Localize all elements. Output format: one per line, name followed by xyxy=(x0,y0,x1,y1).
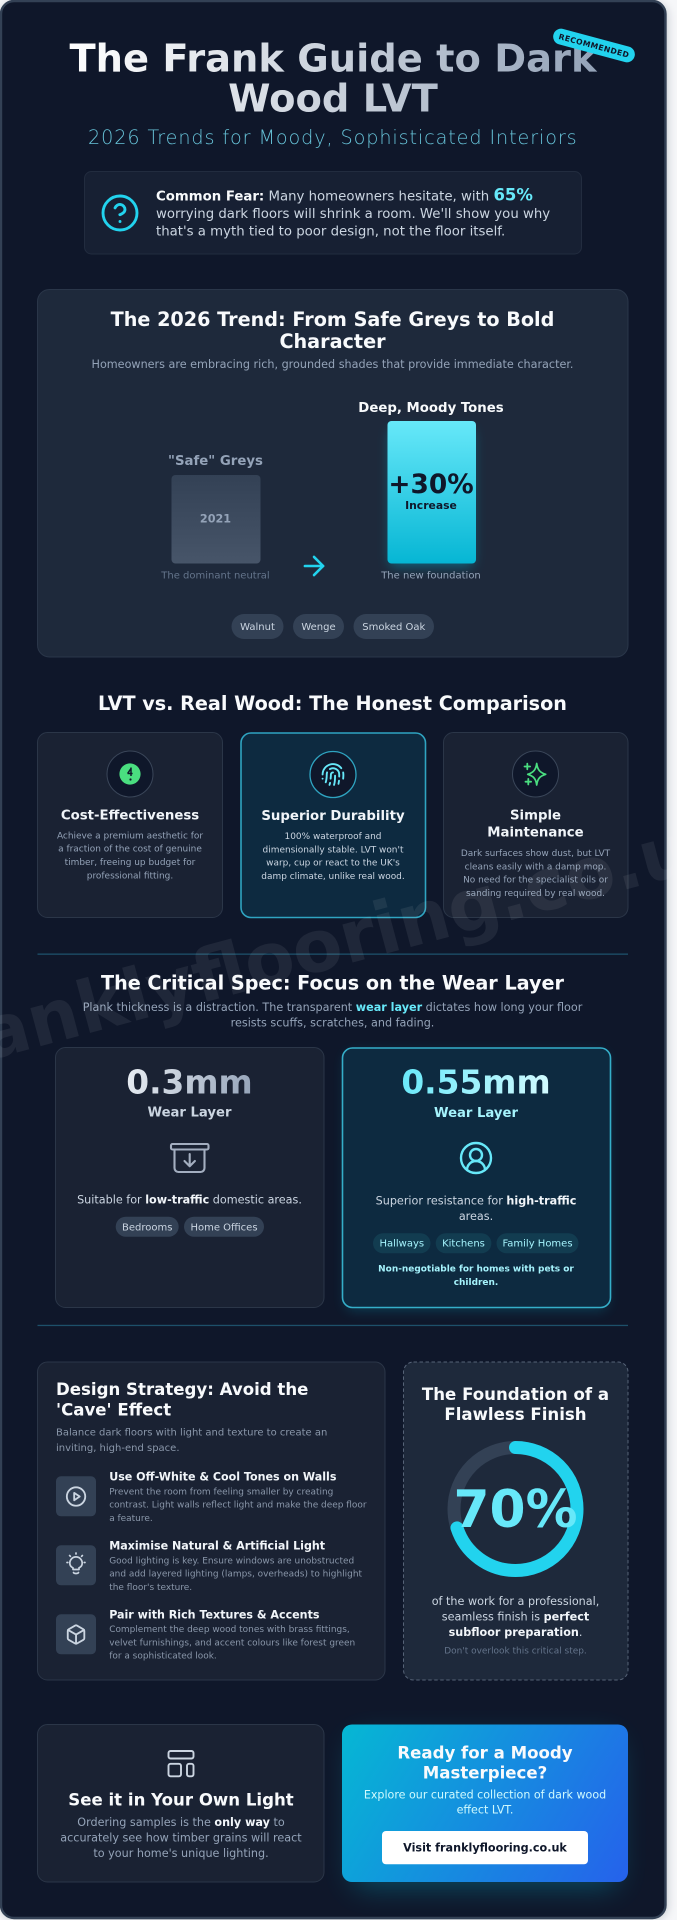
tags: high traffic rooms xyxy=(373,1233,578,1253)
card: cost-effectiveness xyxy=(38,732,222,918)
panel: design strategy xyxy=(38,1362,385,1680)
recommended badge xyxy=(551,27,637,64)
foundation text: seamless finish is perfect xyxy=(442,1611,590,1624)
card text: Achieve a premium aesthetic for xyxy=(57,831,203,841)
panel: samples xyxy=(38,1724,324,1882)
callout text: Common Fear: Many homeowners hesitate, with 65% xyxy=(156,185,533,204)
card text xyxy=(261,832,405,882)
foundation text xyxy=(432,1595,599,1639)
heading: 2026 trend xyxy=(111,308,554,353)
recommended badge: RECOMMENDED xyxy=(558,32,630,60)
card: 0.3mm: 0.3mm xyxy=(126,1063,253,1101)
card text: damp climate, unlike real wood. xyxy=(261,872,405,882)
card: 0.55mm: Superior resistance for high-traffic xyxy=(376,1194,576,1207)
note: children. xyxy=(454,1278,498,1288)
bar: safe greys: The dominant neutral xyxy=(160,571,270,582)
card text: warp, cup or react to the UK's xyxy=(266,859,400,869)
bar: deep moody tones xyxy=(358,401,504,582)
samples text: Ordering samples is the only way to xyxy=(77,1816,285,1829)
bar: deep moody tones: The new foundation xyxy=(380,571,481,582)
card: 0.55mm: Wear Layer xyxy=(434,1106,518,1121)
note: Non-negotiable for homes with pets or xyxy=(378,1265,574,1275)
icon: question mark xyxy=(103,196,137,230)
samples text: to your home's unique lighting. xyxy=(93,1847,269,1860)
tags: high traffic rooms: Hallways xyxy=(379,1239,424,1250)
icon: user xyxy=(461,1143,491,1173)
card: 0.3mm xyxy=(56,1048,324,1308)
panel: foundation xyxy=(404,1362,628,1680)
strategy item: textures: velvet furnishings, and accent colours like forest green xyxy=(109,1638,355,1648)
tags: low traffic rooms: Bedrooms xyxy=(122,1222,172,1233)
tags: high traffic rooms: Kitchens xyxy=(442,1239,485,1250)
card text: dimensionally stable. LVT won't xyxy=(263,845,404,855)
panel: design strategy: Design Strategy: Avoid the xyxy=(56,1380,308,1399)
card text: 100% waterproof and xyxy=(285,832,381,842)
panel: call to action: Masterpiece? xyxy=(423,1763,547,1782)
panel: 2026 trend xyxy=(38,290,628,657)
card text: cleans easily with a damp mop. xyxy=(465,862,606,872)
strategy item: textures xyxy=(56,1608,355,1662)
strategy item: light xyxy=(56,1540,363,1593)
panel: design strategy: 'Cave' Effect xyxy=(56,1400,171,1419)
foundation text: of the work for a professional, xyxy=(432,1595,599,1608)
bar: deep moody tones: Increase xyxy=(405,499,457,512)
heading: 2026 trend: Character xyxy=(279,330,386,353)
callout: common fear xyxy=(84,172,582,254)
note xyxy=(378,1265,574,1288)
wear layer description: Plank thickness is a distraction. The transparent wear layer dictates how long your floor xyxy=(83,1001,583,1014)
strategy item: light: the floor's texture. xyxy=(109,1583,192,1593)
strategy description: Balance dark floors with light and texture to create an xyxy=(56,1428,327,1439)
foundation text: subfloor preparation. xyxy=(449,1626,582,1639)
bar: safe greys: 2021 xyxy=(200,513,231,526)
strategy item: light: Good lighting is key. Ensure windows are unobstructed xyxy=(109,1556,354,1566)
strategy item: light: Maximise Natural & Artificial Light xyxy=(109,1540,326,1553)
cta text: effect LVT. xyxy=(457,1804,513,1817)
card: simple maintenance: Maintenance xyxy=(487,826,584,841)
panel: call to action: Ready for a Moody xyxy=(397,1743,573,1762)
bar: safe greys xyxy=(160,454,270,582)
card text xyxy=(461,849,611,899)
samples text: accurately see how timber grains will react xyxy=(60,1832,302,1845)
card: 0.55mm xyxy=(342,1048,610,1311)
tags: high traffic rooms: Family Homes xyxy=(502,1239,573,1250)
title xyxy=(70,36,598,122)
icon: cost xyxy=(107,751,153,797)
cta text xyxy=(364,1788,606,1817)
panel: foundation: Don't overlook this critical step. xyxy=(444,1646,587,1656)
callout text: worrying dark floors will shrink a room. We'll show you why xyxy=(156,207,550,222)
strategy description xyxy=(56,1428,327,1454)
panel: foundation: Flawless Finish xyxy=(444,1405,587,1424)
card text: sanding required by real wood. xyxy=(466,889,605,899)
heading: 2026 trend: The 2026 Trend: From Safe Greys to Bold xyxy=(111,308,554,331)
panel: foundation: The Foundation of a xyxy=(422,1385,609,1404)
card: 0.3mm: Suitable for low-traffic domestic areas. xyxy=(77,1194,302,1207)
heading: comparison: LVT vs. Real Wood: The Honest Comparison xyxy=(98,692,567,715)
strategy item: walls: a feature. xyxy=(109,1514,153,1524)
card text: a fraction of the cost of genuine xyxy=(58,845,202,855)
strategy item: light: and add layered lighting (lamps, overheads) to highlight xyxy=(109,1570,363,1580)
icon: bin xyxy=(171,1144,208,1172)
tags: wood tones: Walnut xyxy=(240,622,275,633)
card: simple maintenance xyxy=(444,732,628,918)
strategy item: textures: for a sophisticated look. xyxy=(109,1652,217,1662)
card: cost-effectiveness: Cost-Effectiveness xyxy=(61,808,199,823)
card text xyxy=(57,831,203,881)
bar: safe greys: "Safe" Greys xyxy=(168,454,263,469)
strategy item: walls xyxy=(56,1471,367,1524)
card text: timber, freeing up budget for xyxy=(65,858,196,868)
strategy item: walls: contrast. Light walls reflect light and make the deep floor xyxy=(109,1501,367,1511)
strategy item: walls: Prevent the room from feeling smaller by creating xyxy=(109,1487,333,1497)
wear layer description xyxy=(83,1001,583,1029)
card: 0.3mm: Wear Layer xyxy=(148,1106,232,1121)
samples text xyxy=(60,1816,302,1860)
tags: low traffic rooms: Home Offices xyxy=(190,1222,258,1233)
tags: wood tones: Wenge xyxy=(301,622,336,633)
strategy description: inviting, high-end space. xyxy=(56,1443,180,1454)
card: 0.55mm: areas. xyxy=(459,1210,493,1223)
trend description: Homeowners are embracing rich, grounded shades that provide immediate character. xyxy=(92,358,573,371)
icon: fingerprint xyxy=(310,752,356,798)
tags: low traffic rooms xyxy=(116,1217,264,1237)
callout text: that's a myth tied to poor design, not the floor itself. xyxy=(156,224,505,240)
card: superior durability: Superior Durability xyxy=(261,809,405,824)
bar: deep moody tones: +30% xyxy=(388,469,474,500)
icon: layout xyxy=(168,1751,194,1776)
card: superior durability xyxy=(241,733,426,918)
title: Wood LVT xyxy=(228,76,438,122)
strategy item: textures: Complement the deep wood tones with brass fittings, xyxy=(109,1625,350,1635)
card: simple maintenance: Simple xyxy=(510,808,561,823)
subtitle: 2026 Trends for Moody, Sophisticated Interiors xyxy=(88,126,578,149)
icon: sparkles xyxy=(512,751,558,797)
icon: arrow xyxy=(305,557,323,575)
heading: wear layer: The Critical Spec: Focus on the Wear Layer xyxy=(101,971,565,994)
panel: samples: See it in Your Own Light xyxy=(68,1791,294,1810)
title: The Frank Guide to Dark xyxy=(70,36,598,82)
cta text: Explore our curated collection of dark wood xyxy=(364,1788,606,1801)
chart: 70 percent ring: 70% xyxy=(454,1480,577,1540)
card text: professional fitting. xyxy=(87,871,173,881)
bar: deep moody tones: Deep, Moody Tones xyxy=(358,401,504,416)
strategy item: textures: Pair with Rich Textures & Accents xyxy=(109,1608,320,1621)
tags: wood tones: Smoked Oak xyxy=(362,622,426,633)
strategy item: walls: Use Off-White & Cool Tones on Walls xyxy=(109,1471,337,1484)
callout text xyxy=(156,185,550,240)
card text: No need for the specialist oils or xyxy=(463,876,608,886)
tags: wood tones xyxy=(232,614,434,639)
card: 0.55mm: 0.55mm xyxy=(401,1063,551,1101)
button: Visit franklyflooring.co.uk xyxy=(403,1842,567,1855)
wear layer description: resists scuffs, scratches, and fading. xyxy=(231,1016,434,1029)
panel: call to action xyxy=(342,1724,628,1888)
chart: 70 percent ring xyxy=(454,1448,577,1570)
button xyxy=(382,1831,588,1864)
card text: Dark surfaces show dust, but LVT xyxy=(461,849,611,859)
